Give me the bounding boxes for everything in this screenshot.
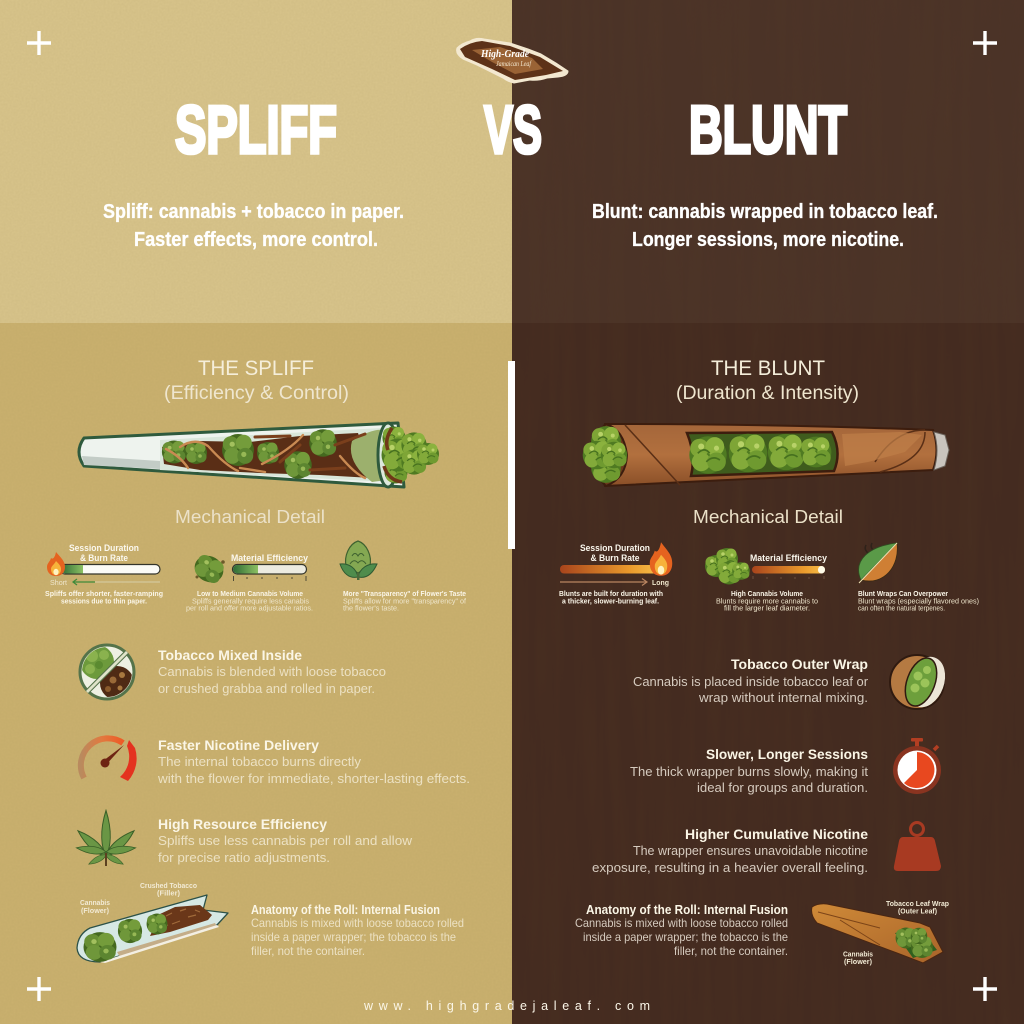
text block: slower longer sessions: The thick wrapper burns slowly, making it	[630, 764, 868, 779]
text block: tobacco outer wrap	[633, 656, 869, 705]
labels: blunt anatomy callouts	[843, 901, 949, 966]
heading: the spliff	[164, 357, 349, 404]
text block: faster nicotine delivery: Faster Nicotine Delivery	[158, 737, 319, 753]
heading: the spliff: (Efficiency & Control)	[164, 383, 349, 404]
stat: blunt session duration: Long	[652, 580, 669, 587]
stat: spliff session duration: Session Duration	[69, 543, 139, 553]
labels: spliff anatomy callouts: Crushed Tobacco	[140, 883, 197, 890]
stat: spliff flower taste	[340, 541, 466, 612]
stat: blunt wrap overpower: Blunt Wraps Can Overpower	[858, 591, 948, 598]
stat: blunt wrap overpower	[858, 543, 979, 612]
labels: blunt anatomy callouts: Tobacco Leaf Wrap	[886, 901, 949, 908]
stat: blunt session duration: Blunts are built for duration with	[559, 591, 663, 598]
title: spliff: SPLIFF	[175, 92, 337, 168]
panel: spliff header background	[0, 0, 512, 323]
text block: spliff anatomy: Cannabis is mixed with loose tobacco rolled	[251, 916, 464, 930]
text block: slower longer sessions	[630, 746, 868, 795]
panel: blunt header background	[512, 0, 1024, 323]
stat: spliff material efficiency: Spliffs generally require less canabis	[192, 598, 310, 606]
stat: spliff session duration: & Burn Rate	[80, 553, 128, 563]
text block: spliff anatomy: Anatomy of the Roll: Internal Fusion	[251, 902, 440, 917]
text block: high resource efficiency	[158, 816, 413, 865]
heading: mechanical detail right: Mechanical Detail	[693, 507, 843, 527]
icon: wrapped cross section	[890, 651, 952, 713]
panel: blunt body background	[512, 323, 1024, 1024]
text block: higher cumulative nicotine: Higher Cumulative Nicotine	[685, 826, 868, 842]
text block: high resource efficiency: Spliffs use less cannabis per roll and allow	[158, 833, 413, 848]
text block: tobacco mixed inside	[158, 647, 386, 696]
stat: blunt wrap overpower: Blunt wraps (especially flavored ones)	[858, 598, 979, 606]
text block: spliff summary	[103, 201, 404, 251]
text block: blunt anatomy: filler, not the container.	[674, 944, 788, 958]
text block: tobacco outer wrap: Cannabis is placed inside tobacco leaf or	[633, 674, 869, 689]
logo: island badge: High-Grade	[480, 48, 529, 60]
stat: spliff material efficiency	[186, 551, 313, 612]
title: vs: VS	[484, 92, 542, 168]
stat: spliff session duration: Short	[50, 580, 67, 587]
icon: cannabis leaf	[75, 810, 137, 867]
labels: blunt anatomy callouts: Cannabis	[843, 952, 873, 958]
stat: blunt wrap overpower: can often the natural terpenes.	[858, 606, 945, 612]
illustration: spliff	[79, 423, 439, 487]
text block: faster nicotine delivery: The internal tobacco burns directly	[158, 754, 362, 769]
labels: spliff anatomy callouts	[80, 883, 197, 915]
logo: island badge: Jamaican Leaf	[496, 60, 532, 68]
center divider	[508, 361, 515, 549]
text block: faster nicotine delivery: with the flower for immediate, shorter-lasting effects.	[157, 771, 470, 786]
text block: blunt summary: Blunt: cannabis wrapped in tobacco leaf.	[592, 201, 938, 223]
labels: spliff anatomy callouts: (Flower)	[81, 908, 109, 915]
text block: blunt summary	[592, 201, 938, 251]
icon: weight	[894, 822, 941, 871]
text block: blunt anatomy: inside a paper wrapper; the tobacco is the	[583, 930, 788, 944]
stat: spliff session duration: sessions due to thin paper.	[61, 598, 147, 606]
stat: blunt material efficiency: Material Efficiency	[750, 553, 827, 563]
icon: corner plus top left	[27, 31, 51, 55]
title: blunt: BLUNT	[689, 92, 847, 168]
illustration: blunt	[583, 424, 949, 486]
stat: blunt session duration	[559, 542, 672, 606]
stat: spliff session duration	[45, 543, 163, 606]
text block: slower longer sessions: ideal for groups and duration.	[697, 780, 868, 795]
text block: high resource efficiency: High Resource Efficiency	[158, 816, 327, 832]
text block: blunt anatomy: Cannabis is mixed with loose tobacco rolled	[575, 916, 788, 930]
icon: stopwatch	[893, 738, 941, 794]
stat: blunt session duration: & Burn Rate	[590, 553, 640, 563]
text block: spliff anatomy: inside a paper wrapper; the tobacco is the	[251, 930, 456, 944]
text block: tobacco mixed inside: Cannabis is blended with loose tobacco	[158, 664, 386, 679]
text block: higher cumulative nicotine	[592, 826, 868, 875]
text block: spliff anatomy	[251, 902, 464, 958]
text block: blunt anatomy	[575, 902, 788, 958]
stat: blunt material efficiency	[705, 548, 827, 612]
stat: blunt session duration: a thicker, slower-burning leaf.	[562, 598, 659, 606]
icon: corner plus bottom right	[973, 977, 997, 1001]
stat: spliff flower taste: the flower's taste.	[343, 606, 399, 612]
text block: blunt summary: Longer sessions, more nicotine.	[632, 229, 904, 251]
icon: no mixing circle	[80, 645, 134, 700]
text block: faster nicotine delivery	[157, 737, 470, 786]
heading: the blunt	[676, 357, 859, 404]
illustration: open paper roll	[77, 895, 228, 963]
panel: spliff body background	[0, 323, 512, 1024]
stat: spliff material efficiency: Low to Medium Cannabis Volume	[197, 591, 303, 598]
icon: corner plus bottom left	[27, 977, 51, 1001]
text block: tobacco outer wrap: wrap without internal mixing.	[698, 690, 868, 705]
text block: spliff summary: Spliff: cannabis + tobacco in paper.	[103, 201, 404, 223]
text block: tobacco outer wrap: Tobacco Outer Wrap	[731, 656, 868, 672]
heading: the blunt: (Duration & Intensity)	[676, 383, 859, 404]
icon: corner plus top right	[973, 31, 997, 55]
text block: higher cumulative nicotine: exposure, resulting in a heavier overall feeling.	[592, 860, 868, 875]
stat: spliff material efficiency: Material Efficiency	[231, 553, 308, 563]
stat: spliff material efficiency: per roll and offer more adjustable ratios.	[186, 606, 313, 612]
stat: spliff session duration: Spliffs offer shorter, faster-ramping	[45, 591, 163, 598]
stat: blunt material efficiency: Blunts require more cannabis to	[716, 598, 818, 606]
labels: spliff anatomy callouts: (Filler)	[157, 890, 180, 898]
labels: blunt anatomy callouts: (Outer Leaf)	[898, 908, 937, 916]
footer: website: www. highgradejaleaf. com	[363, 999, 650, 1013]
text block: tobacco mixed inside: Tobacco Mixed Inside	[158, 647, 302, 663]
icon: speed gauge	[81, 738, 137, 781]
text block: spliff summary: Faster effects, more control.	[134, 229, 378, 251]
stat: spliff flower taste: More "Transparency" of Flower's Taste	[343, 591, 466, 598]
text block: slower longer sessions: Slower, Longer Sessions	[706, 746, 868, 762]
text block: higher cumulative nicotine: The wrapper ensures unavoidable nicotine	[633, 843, 868, 858]
heading: the spliff: THE SPLIFF	[198, 357, 314, 380]
labels: blunt anatomy callouts: (Flower)	[844, 959, 872, 966]
illustration: leaf wrap roll	[812, 904, 943, 963]
stat: spliff flower taste: Spliffs allow for more "transparency" of	[343, 598, 466, 606]
logo: island badge	[457, 38, 568, 83]
text block: high resource efficiency: for precise ratio adjustments.	[158, 850, 330, 865]
heading: the blunt: THE BLUNT	[711, 357, 825, 380]
labels: spliff anatomy callouts: Cannabis	[80, 900, 110, 907]
text block: blunt anatomy: Anatomy of the Roll: Internal Fusion	[586, 902, 788, 917]
stat: blunt material efficiency: High Cannabis Volume	[731, 591, 803, 598]
text block: spliff anatomy: filler, not the container.	[251, 944, 365, 958]
stat: blunt session duration: Session Duration	[580, 543, 650, 553]
heading: mechanical detail left: Mechanical Detail	[175, 507, 325, 527]
stat: blunt material efficiency: fill the larger leaf diameter.	[724, 606, 810, 612]
text block: tobacco mixed inside: or crushed grabba and rolled in paper.	[158, 681, 375, 696]
